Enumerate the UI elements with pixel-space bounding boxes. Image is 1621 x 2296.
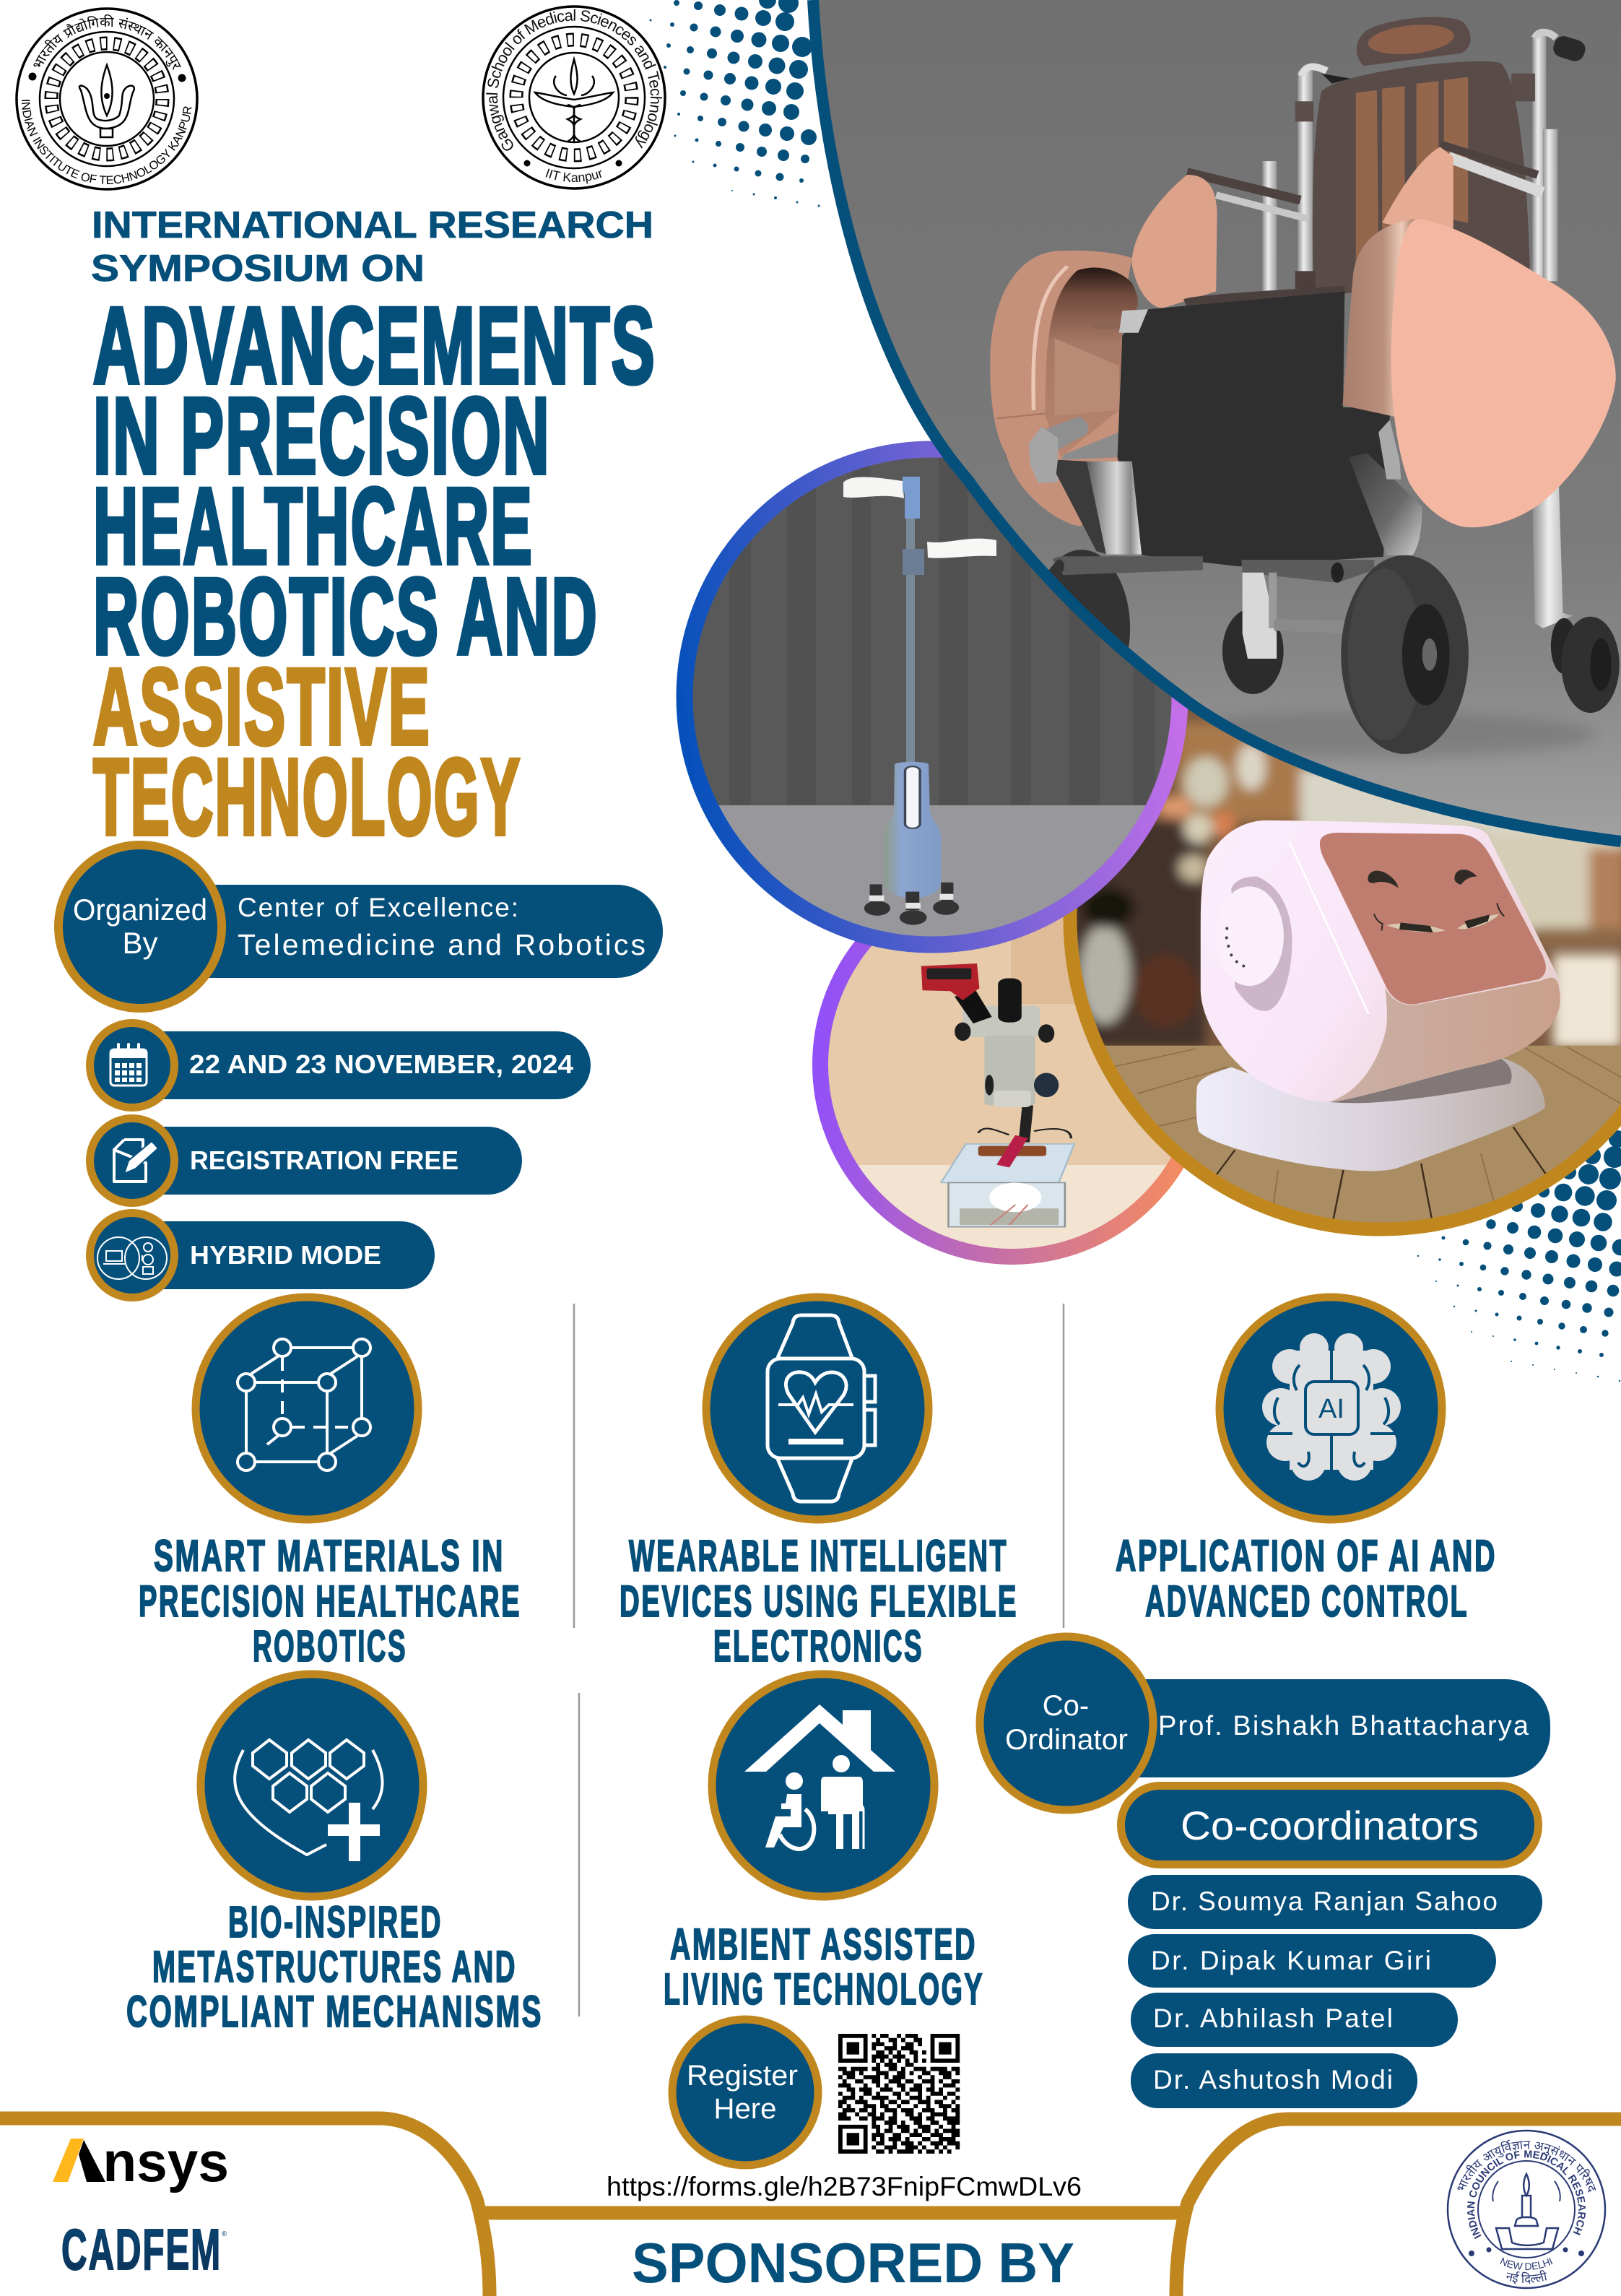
topic label: SMART MATERIALS IN [154, 1531, 505, 1580]
co-ordinator badge: Prof. Bishakh Bhattacharya [1158, 1711, 1529, 1741]
logo: ICMR: भारतीय आयुर्विज्ञान अनुसंधान परिषद [1457, 2139, 1596, 2193]
co-ordinator badge [980, 1637, 1550, 1810]
topic: smart materials [139, 1297, 521, 1671]
topic label: WEARABLE INTELLIGENT [629, 1531, 1008, 1580]
icon: calendar [110, 1044, 147, 1086]
topic label: ELECTRONICS [713, 1621, 924, 1671]
organized by badge [58, 845, 663, 1008]
register here badge: Here [713, 2093, 777, 2125]
logo: ICMR: INDIAN COUNCIL OF MEDICAL RESEARCH [1467, 2150, 1586, 2239]
icon: AI brain: AI [1318, 1394, 1344, 1424]
hybrid mode pill: HYBRID MODE [190, 1240, 381, 1270]
logo: Gangwal School: IIT Kanpur [546, 169, 602, 183]
left flap [1131, 175, 1217, 308]
rear frame and back rest [1262, 17, 1588, 294]
right big disc [1391, 219, 1616, 527]
topic label: AMBIENT ASSISTED [670, 1920, 977, 1969]
title: IN PRECISION [93, 375, 551, 496]
heading: symposium intro: INTERNATIONAL RESEARCH [92, 204, 653, 246]
dividers [574, 1304, 1064, 2016]
topic label: ROBOTICS [253, 1621, 407, 1671]
right flap small [1382, 147, 1453, 238]
topic label [139, 1531, 521, 1671]
co-coordinator names: Dr. Abhilash Patel [1153, 2003, 1393, 2033]
icon: AI brain [1262, 1333, 1401, 1481]
arm rests [1216, 195, 1308, 219]
robot body [1201, 820, 1560, 1102]
logo: CADFEM: ® [222, 2230, 227, 2238]
icon: house with carers [744, 1704, 895, 1849]
mid wheel [1222, 608, 1284, 694]
halftone dots: bottom right [1417, 1130, 1621, 1382]
organized by badge: Center of Excellence: [238, 893, 518, 922]
logo: IIT Kanpur [15, 7, 199, 191]
photo circle: companion robot [1063, 709, 1621, 1236]
logo: IIT Kanpur: INDIAN INSTITUTE OF TECHNOLOGY KANPUR [22, 100, 192, 185]
icon: smart watch [768, 1315, 875, 1502]
topic label [664, 1920, 984, 2014]
heading: symposium intro [91, 204, 653, 290]
actuator [1045, 417, 1088, 451]
footer frame [0, 2118, 1621, 2296]
title: ADVANCEMENTS [93, 285, 656, 406]
photo panel: wheelchair [794, 0, 1621, 867]
co-ordinator badge: Co- [1043, 1690, 1089, 1722]
robot side dial [1231, 877, 1292, 1011]
logo: ICMR: NEW DELHI [1500, 2258, 1552, 2271]
register here badge [672, 2019, 818, 2165]
co-coordinator names [1128, 1875, 1542, 2108]
rear left wheel [1048, 550, 1131, 647]
co-coordinator names: Dr. Soumya Ranjan Sahoo [1151, 1886, 1498, 1916]
rear leg [1532, 481, 1573, 628]
topic: wearable devices [620, 1297, 1018, 1671]
topic: AI and control [1116, 1297, 1497, 1626]
halftone dots: top [650, 0, 820, 207]
title: HEALTHCARE [93, 465, 534, 586]
topic: ambient assisted living [664, 1674, 984, 2014]
register here badge: Register [687, 2060, 798, 2092]
logo: Gangwal School: Gangwal School of Medical Sciences and Technology [486, 9, 662, 151]
topic label [1116, 1531, 1497, 1626]
hybrid mode pill [90, 1213, 435, 1297]
organized by badge: Telemedicine and Robotics [238, 928, 646, 961]
logo: IIT Kanpur: भारतीय प्रौद्योगिकी संस्थान कानपुर [33, 14, 181, 70]
topic label: PRECISION HEALTHCARE [139, 1577, 521, 1626]
QR code [838, 2034, 960, 2154]
organized by badge: Organized [73, 893, 207, 927]
robot base [1196, 1057, 1545, 1171]
icon: honeycomb heart and plus [235, 1740, 383, 1861]
rear wheel [1551, 618, 1573, 673]
sponsored by heading: SPONSORED BY [632, 2231, 1074, 2295]
co-coordinator names: Dr. Ashutosh Modi [1153, 2065, 1393, 2094]
title: TECHNOLOGY [93, 736, 521, 857]
registration pill: REGISTRATION FREE [190, 1145, 459, 1175]
title: ROBOTICS AND [93, 555, 599, 677]
icon: form and pencil [114, 1140, 158, 1182]
heading: symposium intro: SYMPOSIUM ON [91, 248, 425, 290]
topic: bio-inspired [126, 1674, 543, 2036]
right shell [1342, 219, 1417, 418]
topic label: LIVING TECHNOLOGY [664, 1964, 984, 2014]
date pill [90, 1023, 591, 1108]
title: ASSISTIVE [93, 646, 431, 767]
logo: CADFEM: CADFEM [61, 2217, 222, 2282]
left shell [990, 251, 1132, 527]
topic label [620, 1531, 1018, 1671]
icon: lattice cube [238, 1339, 370, 1470]
organized by badge: By [122, 926, 158, 960]
logo: ICMR: नई दिल्ली [1506, 2270, 1547, 2284]
registration URL: https://forms.gle/h2B73FnipFCmwDLv6 [607, 2172, 1082, 2201]
photo circle: smart walking cane [672, 433, 1191, 961]
bin and brackets [1056, 460, 1106, 554]
topic label: DEVICES USING FLEXIBLE [620, 1577, 1018, 1626]
logo: CADFEM [61, 2217, 227, 2282]
title [93, 285, 656, 857]
photo circle: microscope [812, 917, 1184, 1265]
co-ordinator badge: Ordinator [1005, 1724, 1128, 1756]
topic label: COMPLIANT MECHANISMS [126, 1987, 543, 2036]
date pill: 22 AND 23 NOVEMBER, 2024 [189, 1049, 573, 1079]
logo: ICMR [1447, 2129, 1606, 2289]
topic label: BIO-INSPIRED [228, 1897, 443, 1946]
registration pill [90, 1118, 522, 1203]
topic label: METASTRUCTURES AND [152, 1942, 517, 1991]
topic label [126, 1897, 543, 2036]
seat [1183, 286, 1344, 306]
front wheel [1341, 555, 1469, 754]
co-coordinators heading: Co-coordinators [1181, 1803, 1479, 1848]
robot face [1320, 833, 1546, 1005]
co-coordinator names: Dr. Dipak Kumar Giri [1151, 1946, 1431, 1975]
co-coordinators heading [1121, 1785, 1538, 1865]
icon: online and in person [97, 1237, 167, 1279]
footrests [1053, 556, 1203, 575]
